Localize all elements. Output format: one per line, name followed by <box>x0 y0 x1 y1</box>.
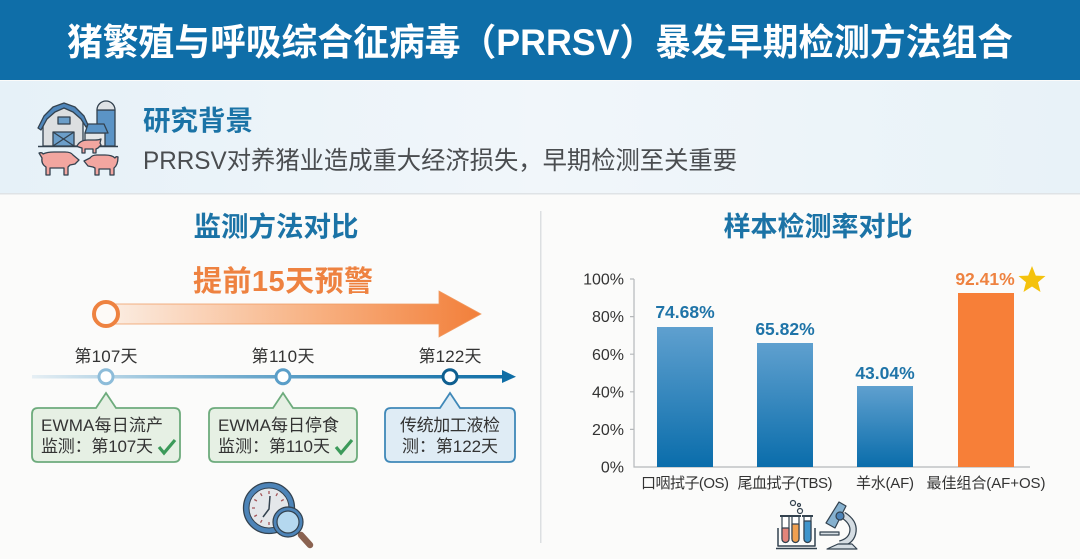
icon: pig right <box>84 155 118 175</box>
panel: research background <box>0 81 1080 194</box>
icon: test tubes and microscope <box>776 500 857 549</box>
icon: check mark <box>159 440 175 453</box>
microscope base <box>827 544 857 549</box>
panel: monitoring comparison <box>32 211 516 545</box>
heading: sample detection rates: 样本检测率对比 <box>724 212 912 242</box>
icon: pig top <box>77 139 101 153</box>
bar: oral swab <box>641 302 729 492</box>
timeline node: day 110 <box>252 347 314 384</box>
y axis: 60% <box>592 347 624 364</box>
callout: EWMA daily feed stop: 监测：第110天 <box>218 437 330 456</box>
bar chart <box>583 266 1046 492</box>
title banner <box>0 0 1080 80</box>
callout: EWMA daily abortion: 监测：第107天 <box>41 437 153 456</box>
bar: best combination: 最佳组合(AF+OS) <box>926 475 1046 492</box>
panel: sample detection rate comparison <box>583 212 1046 549</box>
callout: EWMA daily feed stop: EWMA每日停食 <box>218 416 339 435</box>
bar: tail blood swab: 65.82% <box>755 319 815 339</box>
microscope tube <box>826 502 846 528</box>
title banner: 猪繁殖与呼吸综合征病毒（PRRSV）暴发早期检测方法组合 <box>67 22 1013 63</box>
y axis: 100% <box>583 272 624 288</box>
icon: star <box>1018 266 1046 292</box>
callout: traditional processing fluid: 测：第122天 <box>402 437 498 456</box>
icon: farm barn silo and pigs <box>38 101 118 175</box>
timeline node: day 107: 第107天 <box>74 347 138 366</box>
callout: traditional processing fluid: 传统加工液检 <box>400 416 500 435</box>
heading: research background: 研究背景 <box>143 105 253 136</box>
bar: amniotic fluid: 羊水(AF) <box>856 475 914 492</box>
y axis <box>583 272 1030 476</box>
icon: pig left <box>39 152 79 175</box>
callout: EWMA daily abortion: EWMA每日流产 <box>41 416 163 435</box>
y axis: 40% <box>592 384 624 402</box>
y axis: 0% <box>601 460 624 476</box>
bar: oral swab: 口咽拭子(OS) <box>641 475 729 492</box>
arrow: early warning <box>94 291 481 337</box>
heading: monitoring comparison: 监测方法对比 <box>194 211 358 242</box>
microscope arm <box>840 515 853 544</box>
bar: tail blood swab <box>738 319 832 492</box>
icon: check mark <box>336 440 352 453</box>
y axis: 80% <box>592 309 624 326</box>
text: background statement: PRRSV对养猪业造成重大经济损失，早期检测至关重要 <box>143 147 737 175</box>
bar: amniotic fluid <box>855 363 915 492</box>
text: 15 days early warning: 提前15天预警 <box>193 265 373 298</box>
microscope stage <box>820 532 839 535</box>
timeline node: day 110: 第110天 <box>252 347 314 366</box>
bar: oral swab: 74.68% <box>655 302 715 322</box>
y axis: 20% <box>592 422 624 439</box>
bar: amniotic fluid: 43.04% <box>855 363 915 383</box>
timeline <box>32 347 516 384</box>
callout: EWMA daily abortion <box>32 393 180 462</box>
bar: best combination: 92.41% <box>955 269 1015 289</box>
callout: EWMA daily feed stop <box>209 393 357 462</box>
timeline node: day 122 <box>418 347 482 384</box>
divider <box>540 211 542 543</box>
callout: traditional processing fluid <box>385 393 515 462</box>
timeline node: day 107 <box>74 347 138 384</box>
bar: best combination <box>926 269 1046 492</box>
timeline node: day 122: 第122天 <box>418 347 482 366</box>
bar: tail blood swab: 尾血拭子(TBS) <box>738 475 832 492</box>
icon: clock and magnifier <box>244 482 310 545</box>
